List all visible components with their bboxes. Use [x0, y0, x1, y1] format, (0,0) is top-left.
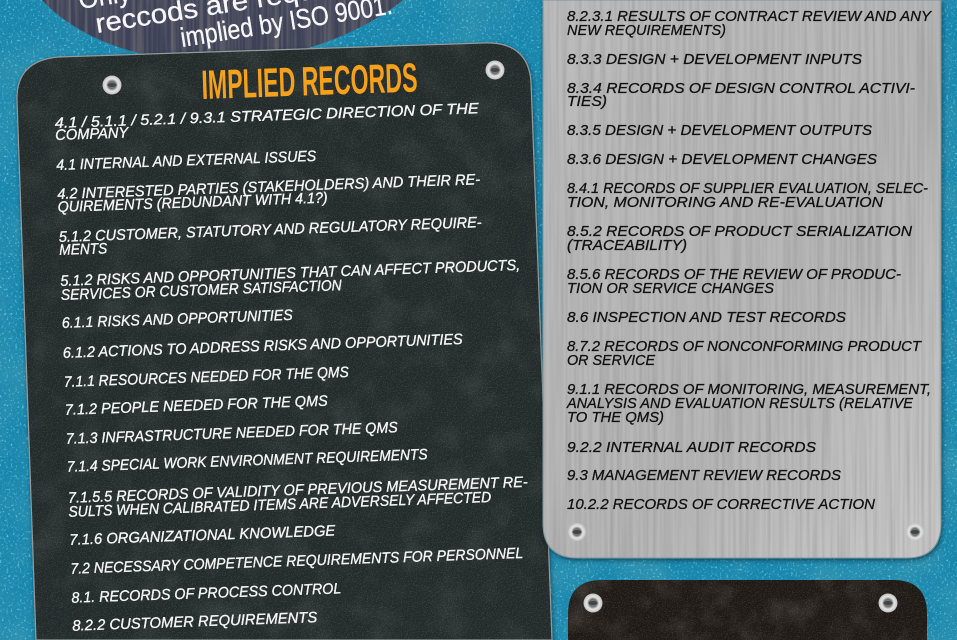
list of implied records: SERVICES OR CUSTOMER SATISFACTION — [61, 277, 342, 304]
list of implied records: 8.2.2 CUSTOMER REQUIREMENTS — [72, 609, 318, 635]
list of implied records: 7.1.6 ORGANIZATIONAL KNOWLEDGE — [69, 522, 336, 549]
list of records continued: NEW REQUIREMENTS) — [567, 22, 726, 39]
list of records continued: TIES) — [567, 93, 607, 110]
list of records continued: 8.4.1 RECORDS OF SUPPLIER EVALUATION, SELEC- — [567, 180, 928, 197]
list of implied records: 4.1 INTERNAL AND EXTERNAL ISSUES — [56, 148, 316, 174]
list of records continued: ANALYSIS AND EVALUATION RESULTS (RELATIVE — [566, 395, 914, 412]
list of implied records: 6.1.1 RISKS AND OPPORTUNITIES — [62, 307, 293, 332]
list of implied records: QUIREMENTS (REDUNDANT WITH 4.1?) — [57, 190, 328, 216]
list of records continued: TO THE QMS) — [567, 409, 664, 426]
list of implied records: 8.1. RECORDS OF PROCESS CONTROL — [71, 580, 342, 607]
screw — [878, 594, 898, 612]
intro text — [76, 0, 399, 53]
list of records continued: 8.3.3 DESIGN + DEVELOPMENT INPUTS — [567, 51, 862, 68]
panel: dark brown plate — [568, 580, 928, 640]
panel: intro ellipse — [42, 0, 403, 54]
panel: brushed metal records list — [543, 0, 941, 558]
list of implied records: 4.1 / 5.1.1 / 5.2.1 / 9.3.1 STRATEGIC DIRECTION OF THE — [55, 100, 480, 132]
panel: implied records — [0, 30, 570, 640]
list of implied records: 7.1.5.5 RECORDS OF VALIDITY OF PREVIOUS MEASUREMENT RE- — [68, 474, 528, 507]
list of implied records: 5.1.2 CUSTOMER, STATUTORY AND REGULATORY REQUIRE- — [59, 214, 482, 246]
screw — [568, 523, 586, 541]
list of records continued: TION, MONITORING AND RE-EVALUATION — [567, 194, 883, 211]
list of records continued: 8.3.5 DESIGN + DEVELOPMENT OUTPUTS — [567, 122, 872, 139]
screw — [102, 76, 122, 94]
list of records continued: 9.1.1 RECORDS OF MONITORING, MEASUREMENT, — [567, 381, 931, 398]
list of records continued: 8.5.6 RECORDS OF THE REVIEW OF PRODUC- — [567, 266, 901, 283]
list of implied records: 7.1.3 INFRASTRUCTURE NEEDED FOR THE QMS — [66, 419, 398, 448]
list of implied records: 5.1.2 RISKS AND OPPORTUNITIES THAT CAN AFFECT PRODUCTS, — [60, 257, 520, 290]
list of records continued: OR SERVICE — [567, 352, 656, 369]
list of implied records: SULTS WHEN CALIBRATED ITEMS ARE ADVERSELY AFFECTED — [68, 489, 492, 521]
list of records continued: 8.6 INSPECTION AND TEST RECORDS — [567, 309, 846, 326]
list of records continued: 9.2.2 INTERNAL AUDIT RECORDS — [567, 439, 816, 456]
list of implied records: 4.2 INTERESTED PARTIES (STAKEHOLDERS) AND THEIR RE- — [57, 171, 480, 203]
heading: implied records: IMPLIED RECORDS — [201, 54, 418, 108]
list of implied records: 7.2 NECESSARY COMPETENCE REQUIREMENTS FOR PERSONNEL — [70, 545, 523, 578]
screw — [584, 594, 602, 612]
screw — [486, 60, 504, 80]
list of records continued: 8.5.2 RECORDS OF PRODUCT SERIALIZATION — [567, 223, 912, 240]
screw — [906, 523, 924, 541]
list of implied records: 7.1.1 RESOURCES NEEDED FOR THE QMS — [64, 364, 349, 391]
list of implied records — [55, 99, 532, 635]
list of implied records: COMPANY — [55, 124, 129, 144]
list of implied records: 6.1.2 ACTIONS TO ADDRESS RISKS AND OPPORTUNITIES — [63, 331, 463, 362]
list of implied records: 7.1.4 SPECIAL WORK ENVIRONMENT REQUIREMENTS — [67, 446, 428, 476]
list of records continued: 8.2.3.1 RESULTS OF CONTRACT REVIEW AND ANY — [567, 8, 932, 25]
list of records continued — [566, 8, 932, 513]
list of implied records: MENTS — [59, 240, 108, 259]
list of records continued: TION OR SERVICE CHANGES — [567, 280, 774, 297]
list of records continued: 9.3 MANAGEMENT REVIEW RECORDS — [567, 467, 841, 484]
list of records continued: 10.2.2 RECORDS OF CORRECTIVE ACTION — [567, 496, 875, 513]
list of records continued: 8.3.4 RECORDS OF DESIGN CONTROL ACTIVI- — [567, 80, 915, 97]
list of records continued: 8.7.2 RECORDS OF NONCONFORMING PRODUCT — [567, 338, 923, 355]
list of implied records: 7.1.2 PEOPLE NEEDED FOR THE QMS — [65, 393, 328, 419]
list of records continued: 8.3.6 DESIGN + DEVELOPMENT CHANGES — [567, 151, 877, 168]
list of records continued: (TRACEABILITY) — [567, 237, 687, 254]
